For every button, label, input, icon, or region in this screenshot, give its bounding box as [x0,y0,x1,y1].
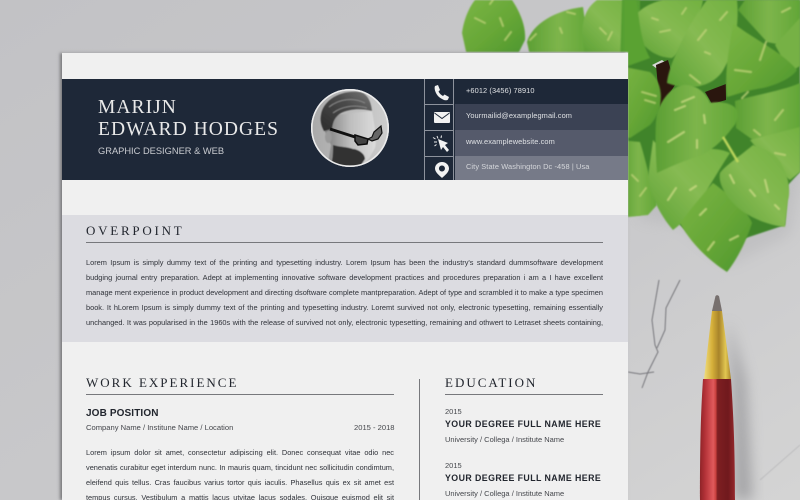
contact: address: City State Washington Dc -458 | Usa [466,162,589,171]
icon: phone [435,85,449,100]
contact: email: Yourmailid@examplegmail.com [466,111,572,120]
overpoint text: book. It hLorem Ipsum is simply dummy text of the printing and typesetting industry. Loremt survived not only, electronic typesetting, remaining essentially [86,303,603,312]
pen gold collar [704,311,731,379]
overpoint text [86,258,603,327]
overpoint text: Lorem Ipsum is simply dummy text of the printing and typesetting industry. Lorem Ipsum has been the industry's standard dummsoftware development [86,258,603,267]
work text [86,448,394,500]
name heading: EDWARD HODGES [98,119,279,140]
job title: JOB POSITION [86,408,159,418]
header band [62,79,628,180]
education entry 1 [445,407,601,444]
resume page [62,53,628,500]
job title: GRAPHIC DESIGNER & WEB [98,146,224,156]
dates: 2015 - 2018 [354,423,395,432]
pen nib [712,295,722,311]
icon: map pin [435,162,449,178]
right side leaves [667,0,800,180]
portrait photo [311,89,389,167]
work text: Lorem ipsum dolor sit amet, consectetur adipiscing elit. Donec consequat vitae odio nec [86,448,394,457]
education entry 1: YOUR DEGREE FULL NAME HERE [445,418,601,428]
leaf shadow [640,0,800,265]
overpoint heading: OVERPOINT [86,223,184,238]
pen red barrel [700,379,735,500]
top leaves behind the paper [462,0,640,62]
education entry 2 [445,461,601,498]
icon column [424,79,455,180]
education entry 2: 2015 [445,461,462,470]
lower leaves [648,85,789,272]
overpoint text: manage ment experience in product development and directing dsoftware complete mantpreparation. Adept of type and scrambled it to make a type specimen [86,288,603,297]
contact rows [455,104,628,180]
education entry 2: YOUR DEGREE FULL NAME HERE [445,472,601,482]
overpoint panel [62,215,628,342]
education entry 2: University / Collega / Institute Name [445,489,564,498]
column divider [419,379,420,500]
education entry 1: University / Collega / Institute Name [445,435,564,444]
contact: website: www.examplewebsite.com [466,137,555,146]
icon: cursor click [433,136,449,152]
plant backing foliage [622,0,800,270]
education entry 1: 2015 [445,407,462,416]
overpoint text: unchanged. It was popularised in the 1960s with the release of survived not only, electronic typesetting, remaining and othwert to Letraset sheets containing, [86,318,603,327]
work text: eleifend quis tellus. Cras faucibus varius tortor quis iaculis. Phasellus quis ex sit amet est [86,478,394,487]
icon: envelope [434,112,450,123]
name heading [98,97,279,140]
name heading: MARIJN [98,97,177,118]
pen shadow [728,320,752,500]
left edge leaves [620,0,703,217]
work experience heading: WORK EXPERIENCE [86,375,238,390]
overpoint text: budging journal entry preparation. Adept at implementing innovative software development practices and procedures preparation i am a I have excellent [86,273,603,282]
work text: venenatis curabitur eget interdum nunc. In mauris quam, tincidunt nec sollicitudin condimtum, [86,463,394,472]
contact: phone: +6012 (3456) 78910 [466,86,535,95]
pot and soil [652,60,726,108]
education heading: EDUCATION [445,375,537,390]
company: Company Name / Institune Name / Location [86,423,233,432]
